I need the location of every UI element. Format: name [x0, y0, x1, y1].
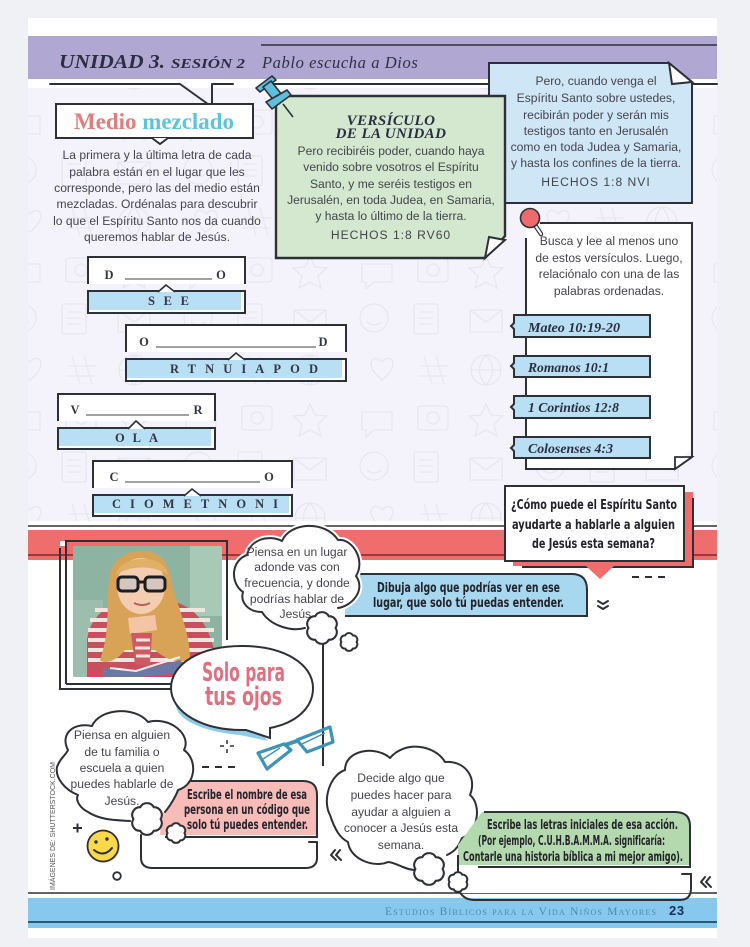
- panel: green action prompt: Escribe las letras iniciales de esa acción.: [487, 818, 678, 833]
- thought cloud: place: frecuencia, y donde: [244, 576, 350, 590]
- thought cloud: place: Jesús.: [280, 607, 314, 621]
- verse tag: 1 Corintios: [511, 396, 650, 418]
- panel: word puzzle 1: [88, 257, 245, 313]
- footer band: [28, 893, 717, 928]
- thought cloud: person: [57, 711, 193, 843]
- header band: Pablo escucha a Dios: [261, 53, 418, 72]
- panel: green verse of the unit: Pero recibiréis poder, cuando haya: [298, 144, 485, 158]
- panel: word puzzle 3: OLA: [115, 431, 158, 445]
- panel: word puzzle 3: V: [70, 403, 80, 417]
- icon: left chevrons: [331, 850, 341, 860]
- panel: green verse of the unit: [276, 96, 505, 258]
- panel: word puzzle 4: [93, 461, 292, 516]
- speech bubble: solo para tus ojos: tus ojos: [205, 682, 282, 712]
- speech bubble: solo para tus ojos: Solo para: [202, 658, 285, 688]
- icon: smiley: [88, 830, 120, 863]
- thought cloud: decide action: ayudar a alguien a: [351, 805, 451, 819]
- panel: green action prompt: [458, 812, 691, 900]
- panel: look up verses note: Busca y lee al menos uno: [540, 234, 679, 248]
- panel: word puzzle 1: SEE: [148, 294, 189, 308]
- panel: word puzzle 3: [58, 394, 215, 449]
- panel: word puzzle 1: O: [216, 268, 226, 282]
- panel: pink code prompt: solo tú puedes entender.: [187, 818, 308, 833]
- icon: blue glasses: [258, 727, 333, 769]
- thought cloud: person: puedes hablarle de: [71, 777, 174, 791]
- vertical connector: [322, 640, 324, 766]
- thought cloud: place: adonde vas con: [254, 560, 340, 574]
- thought cloud: place: [234, 526, 359, 651]
- thought cloud: place: Piensa en un lugar: [247, 545, 347, 559]
- panel: blue drawing prompt: lugar, que solo tú puedas entender.: [373, 596, 564, 611]
- speech bubble: solo para tus ojos: [171, 646, 313, 741]
- instructions text: La primera y la última letra de cada: [63, 148, 252, 162]
- thought cloud: person: Jesús.: [105, 794, 139, 808]
- panel: blue verse note: Espíritu Santo sobre ustedes,: [517, 91, 675, 105]
- panel: look up verses note: [526, 223, 692, 469]
- verse tag: Colosenses: Colosenses 4:3: [528, 442, 613, 457]
- panel: word puzzle 1: D: [104, 268, 114, 282]
- thought cloud: decide action: semana.: [378, 838, 424, 852]
- panel: green verse of the unit: HECHOS 1:8 RV60: [331, 228, 451, 242]
- instructions text: palabra están en el lugar que les: [69, 165, 245, 179]
- header band: SESIÓN 2: [171, 56, 245, 71]
- verse tag: Mateo: Mateo 10:19-20: [527, 321, 620, 336]
- panel: green verse of the unit: VERSÍCULO: [347, 112, 435, 129]
- panel: question box: [505, 486, 693, 579]
- panel: blue verse note: testigos tanto en Jerusalén: [524, 124, 668, 138]
- panel: blue drawing prompt: [345, 574, 587, 616]
- panel: word puzzle 2: [126, 325, 346, 381]
- icon: right chevrons: [701, 877, 711, 887]
- verse tag: 1 Corintios: 1 Corintios 12:8: [528, 401, 619, 416]
- dashes: [632, 576, 665, 578]
- panel: green verse of the unit: DE LA UNIDAD: [335, 126, 446, 142]
- instructions text: queremos hablar de Jesús.: [84, 230, 230, 244]
- thought cloud: decide action: [327, 747, 477, 870]
- instructions text: corresponde, pero las del medio están: [54, 181, 260, 195]
- panel: word puzzle 2: O: [139, 335, 149, 349]
- panel: look up verses note: de estos versículos. Luego,: [535, 251, 683, 265]
- header band: UNIDAD 3.: [59, 51, 165, 73]
- panel: green verse of the unit: y hasta lo último de la tierra.: [315, 209, 467, 223]
- panel: question box: ¿Cómo puede el Espíritu Santo: [511, 498, 677, 513]
- header band: [28, 36, 717, 79]
- panel: look up verses note: relaciónalo con una de las: [539, 267, 679, 281]
- dashes: [202, 766, 237, 768]
- thought cloud: person: Piensa en alguien: [74, 728, 170, 742]
- panel: word puzzle 2: D: [318, 335, 328, 349]
- thought puffs: action cloud: [414, 853, 467, 892]
- icon: down chevrons: [598, 601, 608, 609]
- instructions text: [53, 148, 261, 244]
- panel: word puzzle 4: CIOMETNONI: [112, 497, 278, 511]
- verse tag: Colosenses: [511, 437, 650, 458]
- photo credit: IMÁGENES DE: SHUTTERSTOCK.COM: [48, 762, 57, 890]
- icon: sparkle: [220, 740, 234, 753]
- panel: pink code prompt: Escribe el nombre de esa: [187, 788, 307, 803]
- verse tag: Romanos: Romanos 10:1: [527, 361, 609, 376]
- header rule lines: [50, 84, 717, 107]
- panel: green verse of the unit: Jerusalén, en toda Judea, en Samaria,: [287, 193, 495, 207]
- panel: word puzzle 2: RTNUIAPOD: [170, 362, 318, 376]
- instructions text: lo que el Espíritu Santo nos da cuando: [53, 214, 261, 228]
- icon: blue pin: [256, 76, 293, 117]
- panel: green verse of the unit: Santo, y me seréis testigos en: [310, 177, 472, 191]
- panel: word puzzle 4: C: [109, 470, 119, 484]
- thought cloud: decide action: Decide algo que: [357, 771, 445, 785]
- thought cloud: person: escuela a quien: [80, 761, 164, 775]
- footer band: 23: [669, 903, 685, 918]
- icon: red pin: [520, 208, 541, 234]
- panel: word puzzle 4: O: [264, 470, 274, 484]
- thought cloud: person: de tu familia o: [84, 745, 160, 759]
- thought cloud: place: podrías hablar de: [250, 592, 344, 606]
- panel: pink code prompt: [141, 781, 317, 868]
- panel: blue verse note: HECHOS 1:8 NVI: [541, 175, 651, 189]
- panel: medio mezclado title: Medio mezclado: [74, 109, 234, 134]
- panel: look up verses note: palabras ordenadas.: [554, 284, 664, 298]
- red band: [28, 521, 717, 560]
- thought cloud: decide action: puedes hacer para: [351, 788, 452, 802]
- icon: plus: [73, 824, 82, 832]
- instructions text: mezcladas. Ordénalas para descubrir: [56, 197, 258, 211]
- panel: photo of girl with glasses: [60, 541, 227, 689]
- panel: blue verse note: [489, 63, 692, 203]
- panel: green verse of the unit: venido sobre vosotros el Espíritu: [303, 160, 479, 174]
- verse tag: Romanos: [511, 356, 650, 377]
- panel: blue verse note: y hasta los confines de la tierra.: [511, 156, 681, 170]
- panel: question box: ayudarte a hablarle a alguien: [512, 518, 675, 533]
- panel: pink code prompt: persona en un código que: [184, 803, 310, 818]
- panel: blue drawing prompt: Dibuja algo que podrías ver en ese: [377, 581, 560, 596]
- panel: blue verse note: recibirán poder y serán mis: [523, 108, 669, 122]
- panel: question box: de Jesús esta semana?: [532, 537, 655, 552]
- panel: blue verse note: como en toda Judea y Samaria,: [511, 140, 681, 154]
- panel: word puzzle 3: R: [193, 403, 203, 417]
- panel: medio mezclado title: [56, 104, 253, 144]
- footer band: Estudios Bíblicos para la Vida Niños Mayores: [385, 906, 656, 918]
- panel: blue verse note: Pero, cuando venga el: [535, 74, 657, 88]
- verse tag: Mateo: [511, 315, 650, 337]
- icon: ring: [113, 872, 121, 880]
- thought cloud: decide action: conocer a Jesús esta: [344, 821, 458, 835]
